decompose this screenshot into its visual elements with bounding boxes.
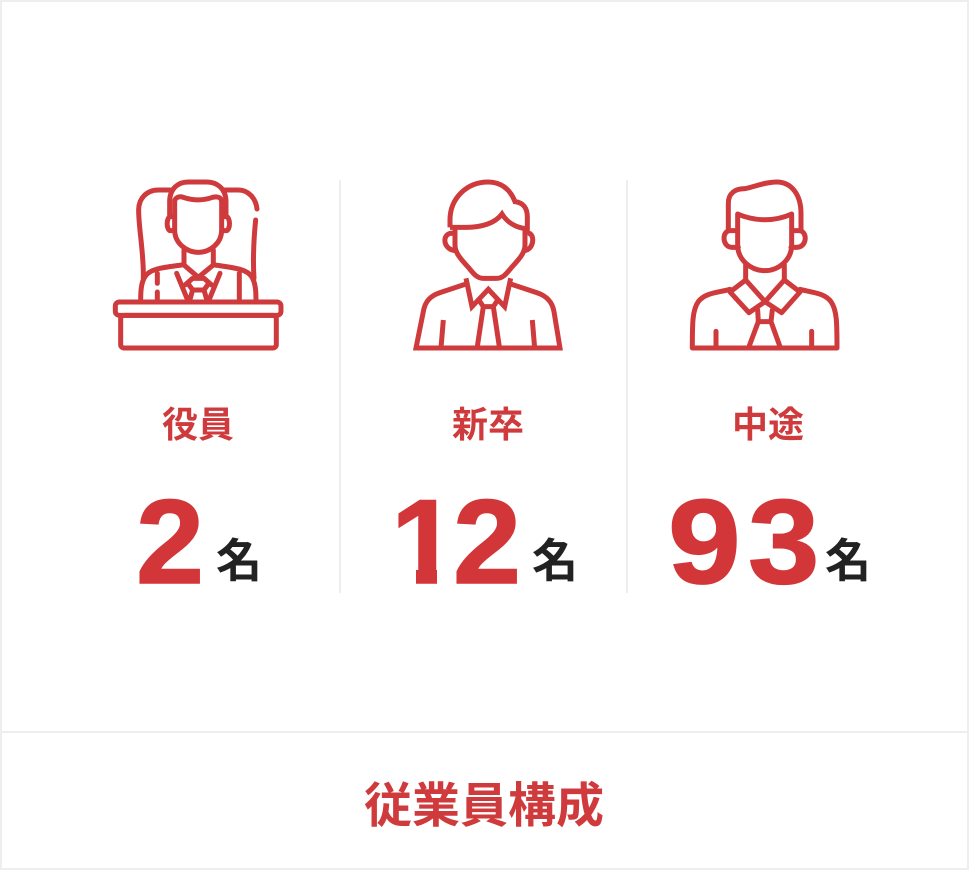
stat: new graduates count: 1 (391, 475, 458, 609)
stat: mid-career count: 9 (668, 475, 741, 609)
label: mid-career: 中途 (732, 404, 804, 445)
stat: mid-career count: 名 (825, 535, 871, 587)
stat: executives count: 名 (216, 535, 262, 587)
label: executives: 役員 (162, 404, 234, 445)
stat: executives count (136, 475, 262, 609)
label: new graduates: 新卒 (452, 404, 524, 445)
stat: mid-career count (668, 475, 871, 609)
stat: executives count: 2 (136, 475, 204, 609)
stat: new graduates count: 名 (532, 535, 578, 587)
stat: new graduates count (398, 475, 578, 609)
title: 従業員構成 (364, 780, 604, 833)
stat: mid-career count: 3 (748, 475, 819, 609)
stat: new graduates count: 2 (453, 475, 521, 609)
